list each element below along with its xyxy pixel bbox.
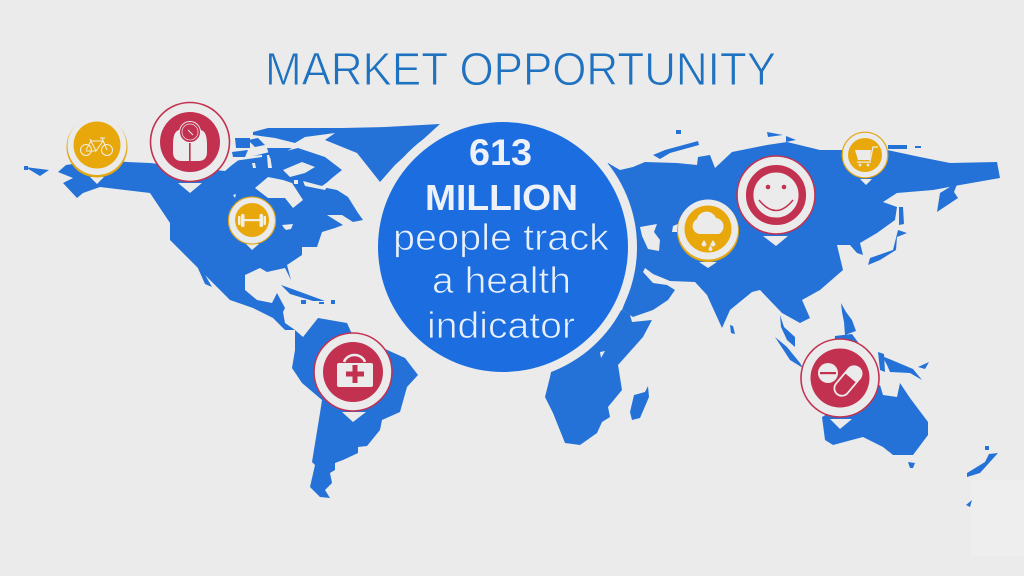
- map: baja california: [197, 266, 212, 287]
- map: australia: [822, 383, 928, 455]
- icon: tablet and capsule: [818, 363, 865, 399]
- pin: rain cloud: [677, 200, 739, 268]
- line: people track: people track: [393, 217, 610, 258]
- map: japan, sakhalin and kamchatka: [868, 182, 958, 265]
- title: MARKET OPPORTUNITY: [265, 43, 776, 95]
- map: hudson strait: [232, 155, 332, 190]
- map: africa: [545, 310, 652, 445]
- world map: [24, 124, 1000, 507]
- map: southeast asia and indonesia: [775, 303, 885, 372]
- stat: 613: 613: [469, 132, 532, 173]
- line: indicator: indicator: [427, 305, 575, 346]
- map: new guinea: [882, 356, 929, 380]
- map: caspian sea gap: [640, 224, 660, 251]
- map: tasmania: [908, 462, 915, 468]
- map: great lakes: [233, 194, 293, 230]
- pin: shopping cart: [842, 132, 888, 185]
- map: horn of africa gap: [600, 351, 605, 358]
- map: south america: [292, 318, 418, 498]
- icon: dumbbell: [238, 214, 266, 227]
- icon: cloud and rain: [693, 212, 724, 251]
- map: sri lanka: [730, 325, 735, 334]
- map: arctic islands: [24, 138, 374, 176]
- map: hudson bay: [255, 177, 303, 208]
- pin: first aid kit: [314, 333, 392, 422]
- map: eurasia: [560, 142, 1000, 328]
- map: greenland and ellesmere: [253, 124, 440, 182]
- icon: scale: [173, 122, 207, 162]
- map: black sea gap: [672, 224, 678, 232]
- pin: smiley: [737, 156, 815, 246]
- map: north and central america: [58, 148, 363, 330]
- pin: weighing scale: [150, 102, 230, 193]
- icon: bicycle: [80, 138, 112, 156]
- pin: bicycle: [66, 116, 128, 184]
- icon: medical bag: [337, 355, 373, 387]
- map: arctic russia islands: [653, 130, 921, 159]
- map: caribbean islands: [281, 285, 335, 304]
- map: new zealand: [966, 446, 998, 507]
- centre callout: [369, 113, 637, 381]
- pin: dumbbell: [228, 197, 276, 250]
- pin: pills: [801, 339, 879, 429]
- line: a health: a health: [432, 260, 571, 301]
- icon: smile: [759, 185, 793, 210]
- icon: cart: [855, 147, 878, 166]
- map: madagascar: [630, 386, 649, 420]
- stat: million: MILLION: [425, 177, 578, 218]
